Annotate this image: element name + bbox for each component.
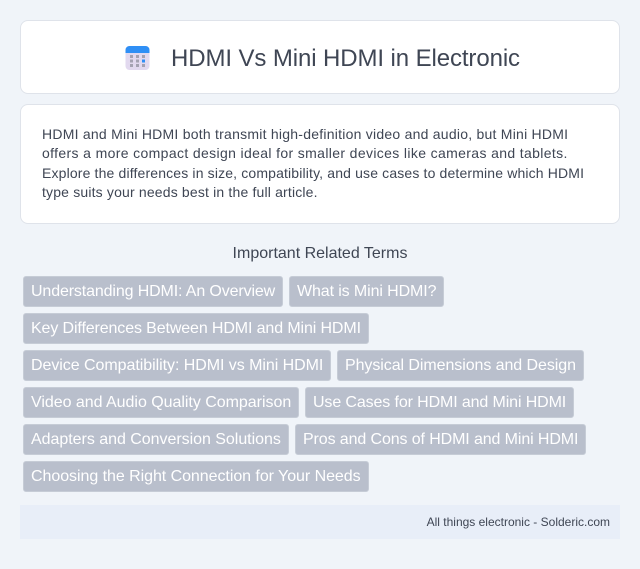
chip: Video and Audio: Video and Audio Quality Comparison (31, 394, 291, 411)
chip: What is Mini HDMI (289, 276, 444, 307)
chip: What is Mini HDMI: What is Mini HDMI? (297, 283, 436, 300)
chip: Device Compatibility (23, 350, 331, 381)
panel: intro paragraph: type suits your needs best in the full article. (42, 184, 318, 200)
chip: Pros and Cons: Pros and Cons of HDMI and Mini HDMI (303, 431, 578, 448)
title: HDMI Vs Mini HDMI in Electronic (171, 45, 520, 72)
panel: intro paragraph: Explore the differences in size, compatibility, and use cases to determine which HDMI (42, 165, 584, 181)
chip: Physical Dimensions: Physical Dimensions and Design (345, 357, 576, 374)
chip: Adapters (23, 424, 289, 455)
panel: title header (20, 20, 620, 94)
chip: Choosing: Choosing the Right Connection for Your Needs (31, 468, 361, 485)
chip: Use Cases (305, 387, 574, 418)
chip: Device Compatibility: Device Compatibility: HDMI vs Mini HDMI (31, 357, 323, 374)
panel: intro paragraph: offers a more compact design ideal for smaller devices like cameras and tablets. (42, 145, 568, 161)
chip: Choosing (23, 461, 369, 492)
panel: intro paragraph: HDMI and Mini HDMI both transmit high-definition video and audio, but Mini HDMI (42, 126, 568, 142)
panel: intro paragraph (20, 104, 620, 224)
chip: Understanding HDMI: Understanding HDMI: An Overview (31, 283, 275, 300)
chip: Adapters: Adapters and Conversion Solutions (31, 431, 281, 448)
chip: Key Differences (23, 313, 369, 344)
chip: Pros and Cons (295, 424, 586, 455)
chip: Use Cases: Use Cases for HDMI and Mini HDMI (313, 394, 566, 411)
icon: calendar grid (126, 46, 150, 70)
footer bar: All things electronic - Solderic.com (427, 515, 610, 529)
chip: Key Differences: Key Differences Between HDMI and Mini HDMI (31, 320, 361, 337)
heading: related terms: Important Related Terms (233, 245, 407, 262)
chip: Video and Audio (23, 387, 299, 418)
chip: Physical Dimensions (337, 350, 584, 381)
footer bar (20, 505, 620, 539)
chip: Understanding HDMI (23, 276, 283, 307)
